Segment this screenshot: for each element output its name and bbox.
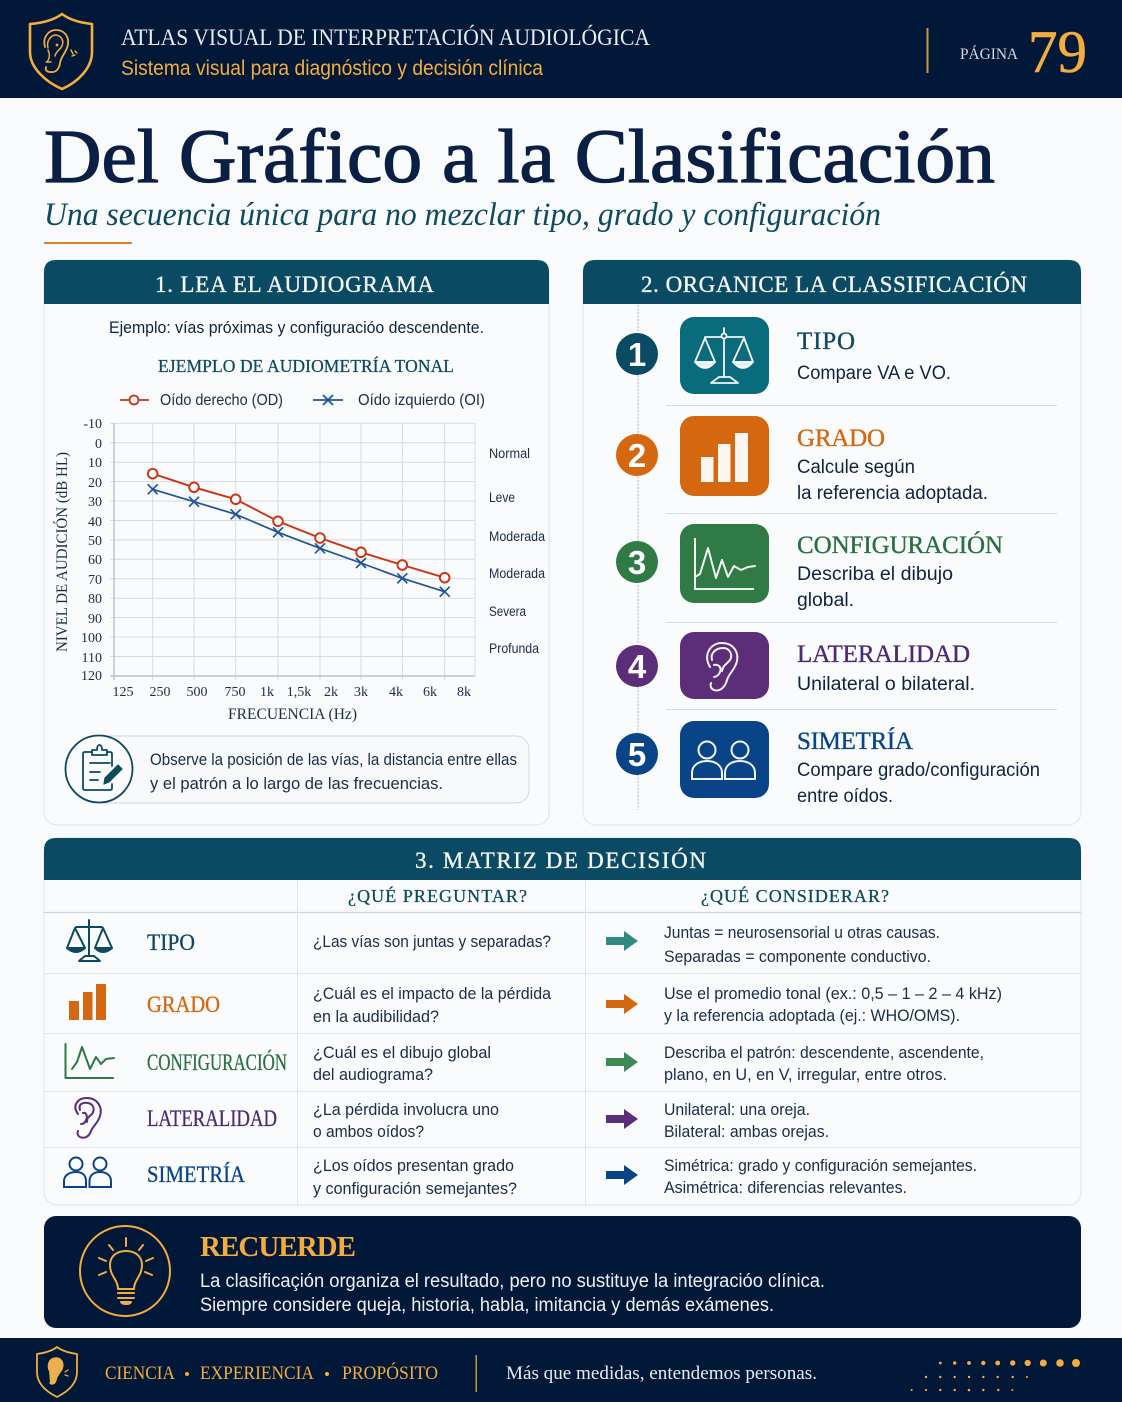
step heading tipo: TIPO <box>797 328 855 355</box>
column heading: preguntar: ¿QUÉ PREGUNTAR? <box>348 885 527 906</box>
row question lateralidad <box>313 1100 499 1141</box>
recuerde text <box>200 1271 825 1316</box>
step text configuracion <box>797 564 953 611</box>
row label grado: GRADO <box>147 992 220 1017</box>
icon: ear <box>75 1098 101 1138</box>
y axis labels: 120 <box>81 669 102 684</box>
footer values: EXPERIENCIA <box>200 1364 315 1384</box>
arrow grado <box>606 994 638 1014</box>
row answer tipo: Juntas = neurosensorial u otras causas. <box>664 924 940 942</box>
step text configuracion: Describa el dibujo <box>797 564 953 585</box>
number badge 2 <box>616 434 658 476</box>
number badge 3 <box>616 541 658 583</box>
step heading lateralidad: LATERALIDAD <box>797 641 970 668</box>
x axis labels: 250 <box>150 685 170 700</box>
y axis labels: 20 <box>88 476 102 491</box>
row question grado <box>313 984 552 1026</box>
row: lateralidad <box>75 1098 829 1141</box>
step text grado: Calcule según <box>797 457 915 478</box>
example note: Ejemplo: vías próximas y configuracióo descendente. <box>109 319 484 337</box>
row question simetria <box>313 1156 517 1198</box>
degree labels: Moderada <box>489 566 545 581</box>
icon: bars <box>69 984 106 1020</box>
step 2: grado <box>616 416 988 504</box>
icon: ear <box>680 632 769 699</box>
page label: PÁGINA <box>960 44 1018 63</box>
step text lateralidad: Unilateral o bilateral. <box>797 674 975 695</box>
y axis labels: 60 <box>88 553 102 568</box>
panel heading 1 <box>44 260 549 304</box>
row: grado <box>69 984 1002 1026</box>
x axis labels: 6k <box>423 685 437 700</box>
footer dots <box>911 1359 1080 1391</box>
step 3: configuracion <box>616 524 1003 611</box>
x axis labels: 3k <box>354 685 368 700</box>
step text simetria: entre oídos. <box>797 786 893 807</box>
row question lateralidad: ¿La pérdida involucra uno <box>313 1100 499 1119</box>
degree labels: Moderada <box>489 529 545 544</box>
step text simetria: Compare grado/configuración <box>797 760 1040 781</box>
number badge 1 <box>616 333 658 375</box>
row answer grado: y la referencia adoptada (ej.: WHO/OMS). <box>664 1007 960 1025</box>
row question configuracion: ¿Cuál es el dibujo global <box>313 1043 491 1062</box>
step heading configuracion: CONFIGURACIÓN <box>797 531 1003 559</box>
panel: lea el audiograma <box>44 260 549 825</box>
number badge 1: 1 <box>628 336 646 373</box>
row question grado: en la audibilidad? <box>313 1007 439 1026</box>
arrow simetria <box>606 1165 638 1185</box>
panel heading 3 <box>44 838 1081 880</box>
header band <box>0 0 1122 98</box>
row answer simetria <box>664 1157 977 1197</box>
row answer grado: Use el promedio tonal (ex.: 0,5 – 1 – 2 – 4 kHz) <box>664 985 1002 1003</box>
x axis labels: 2k <box>324 685 338 700</box>
row answer configuracion: Describa el patrón: descendente, ascendente, <box>664 1044 984 1062</box>
y axis labels: -10 <box>83 417 102 432</box>
callout: observe: y el patrón a lo largo de las frecuencias. <box>150 775 443 793</box>
footer values: CIENCIA <box>105 1364 176 1384</box>
number badge 4 <box>616 645 658 687</box>
panel: matriz de decision <box>44 838 1081 1205</box>
number badge 2: 2 <box>628 437 646 474</box>
y axis labels: 0 <box>95 437 102 452</box>
row: configuracion <box>66 1043 984 1084</box>
arrow configuracion <box>606 1052 638 1072</box>
series: left ear <box>148 484 450 597</box>
row label lateralidad: LATERALIDAD <box>147 1106 277 1131</box>
x axis labels <box>112 685 471 700</box>
y axis labels: 10 <box>88 456 102 471</box>
step text simetria <box>797 760 1040 807</box>
recuerde text: La clasificaçión organiza el resultado, pero no sustituye la integracióo clínica. <box>200 1271 825 1292</box>
row question tipo: ¿Las vías son juntas y separadas? <box>313 932 551 951</box>
step text configuracion: global. <box>797 590 854 611</box>
icon: light bulb <box>80 1226 170 1316</box>
icon: ear shield logo <box>30 14 92 89</box>
degree labels: Leve <box>489 490 515 505</box>
arrow lateralidad <box>606 1109 638 1129</box>
step heading grado: GRADO <box>797 425 885 452</box>
row answer configuracion: plano, en U, en V, irregular, entre otros. <box>664 1066 947 1084</box>
degree labels <box>489 446 545 656</box>
row answer grado <box>664 985 1002 1025</box>
footer values: PROPÓSITO <box>342 1362 438 1384</box>
page number: 79 <box>1028 19 1087 85</box>
step text tipo: Compare VA e VO. <box>797 363 951 384</box>
row answer tipo: Separadas = componente conductivo. <box>664 948 931 966</box>
x axis labels: 1k <box>260 685 274 700</box>
step 1: tipo <box>616 317 951 394</box>
callout: recuerde <box>44 1216 1081 1328</box>
row question grado: ¿Cuál es el impacto de la pérdida <box>313 984 552 1003</box>
row question simetria: ¿Los oídos presentan grado <box>313 1156 514 1175</box>
recuerde heading: RECUERDE <box>200 1231 356 1263</box>
y axis labels: 100 <box>81 631 102 646</box>
header title: ATLAS VISUAL DE INTERPRETACIÓN AUDIOLÓGICA <box>121 24 650 50</box>
footer values <box>105 1362 438 1384</box>
column heading: considerar: ¿QUÉ CONSIDERAR? <box>701 885 889 906</box>
row answer lateralidad: Unilateral: una oreja. <box>664 1101 810 1119</box>
row: simetria <box>64 1156 977 1198</box>
y axis labels: 110 <box>82 651 102 666</box>
number badge 5 <box>616 733 658 775</box>
series: right ear <box>148 469 450 582</box>
callout: observe: Observe la posición de las vías, la distancia entre ellas <box>150 751 517 769</box>
icon: balance <box>67 920 112 961</box>
icon: bars <box>680 416 769 496</box>
row question configuracion: del audiograma? <box>313 1065 433 1084</box>
x axis title: FRECUENCIA (Hz) <box>228 706 357 723</box>
icon: balance <box>680 317 769 394</box>
y axis labels: 50 <box>88 534 102 549</box>
chart legend: Oído derecho (OD) <box>160 392 283 409</box>
y axis labels: 40 <box>88 515 102 530</box>
y axis labels: 90 <box>88 612 102 627</box>
chart title: EJEMPLO DE AUDIOMETRÍA TONAL <box>158 356 454 376</box>
degree labels: Profunda <box>489 641 539 656</box>
step text grado: la referencia adoptada. <box>797 483 988 504</box>
x axis labels: 125 <box>112 685 134 700</box>
x axis labels: 4k <box>389 685 403 700</box>
icon: clipboard <box>66 736 132 802</box>
step text grado <box>797 457 988 504</box>
row label simetria: SIMETRÍA <box>147 1162 245 1187</box>
y axis labels: 70 <box>88 573 102 588</box>
step heading simetria: SIMETRÍA <box>797 727 913 755</box>
row answer simetria: Asimétrica: diferencias relevantes. <box>664 1179 907 1197</box>
callout: observe <box>66 736 529 803</box>
row label tipo: TIPO <box>147 930 195 955</box>
x axis labels: 1,5k <box>287 685 311 700</box>
icon: two people <box>64 1158 111 1187</box>
header subtitle: Sistema visual para diagnóstico y decisión clínica <box>121 57 543 80</box>
row: tipo <box>67 920 940 966</box>
y axis title: NIVEL DE AUDICIÓN (dB HL) <box>54 452 71 652</box>
step 4: lateralidad <box>616 632 975 699</box>
step 5: simetria <box>616 721 1040 807</box>
y axis labels: 80 <box>88 592 102 607</box>
row label configuracion: CONFIGURACIÓN <box>147 1049 287 1075</box>
panel heading 2: 2. ORGANICE LA CLASSIFICACIÓN <box>641 271 1027 297</box>
number badge 4: 4 <box>628 648 647 685</box>
chart legend <box>120 392 485 409</box>
x axis labels: 500 <box>186 685 208 700</box>
panel heading 2 <box>583 260 1081 304</box>
chart legend: Oído izquierdo (OI) <box>358 392 485 409</box>
row question configuracion <box>313 1043 491 1084</box>
degree labels: Severa <box>489 604 526 619</box>
row answer lateralidad: Bilateral: ambas orejas. <box>664 1123 829 1141</box>
degree labels: Normal <box>489 446 530 461</box>
icon: waveform <box>680 524 769 603</box>
y axis labels <box>81 417 102 684</box>
panel heading 1: 1. LEA EL AUDIOGRAMA <box>155 272 434 297</box>
number badge 3: 3 <box>628 544 646 581</box>
y axis labels: 30 <box>88 495 102 510</box>
panel heading 3: 3. MATRIZ DE DECISIÓN <box>415 847 706 873</box>
main title: Del Gráfico a la Clasificación <box>44 115 995 199</box>
row answer configuracion <box>664 1044 984 1084</box>
icon: footer shield <box>37 1347 77 1397</box>
main subtitle: Una secuencia única para no mezclar tipo, grado y configuración <box>44 197 881 233</box>
x axis labels: 8k <box>457 685 471 700</box>
panel: organice la clasificacion <box>583 260 1081 825</box>
row answer lateralidad <box>664 1101 829 1141</box>
footer band <box>0 1338 1122 1402</box>
number badge 5: 5 <box>628 736 646 773</box>
x axis labels: 750 <box>224 685 246 700</box>
row answer tipo <box>664 924 940 966</box>
footer tagline: Más que medidas, entendemos personas. <box>506 1364 817 1384</box>
icon: two people <box>680 721 769 798</box>
recuerde text: Siempre considere queja, historia, habla, imitancia y demás exámenes. <box>200 1295 774 1316</box>
icon: waveform <box>66 1044 114 1078</box>
row answer simetria: Simétrica: grado y configuración semejantes. <box>664 1157 977 1175</box>
audiogram chart <box>54 417 545 723</box>
arrow tipo <box>606 931 638 951</box>
row question lateralidad: o ambos oídos? <box>313 1122 424 1141</box>
row question simetria: y configuración semejantes? <box>313 1179 517 1198</box>
